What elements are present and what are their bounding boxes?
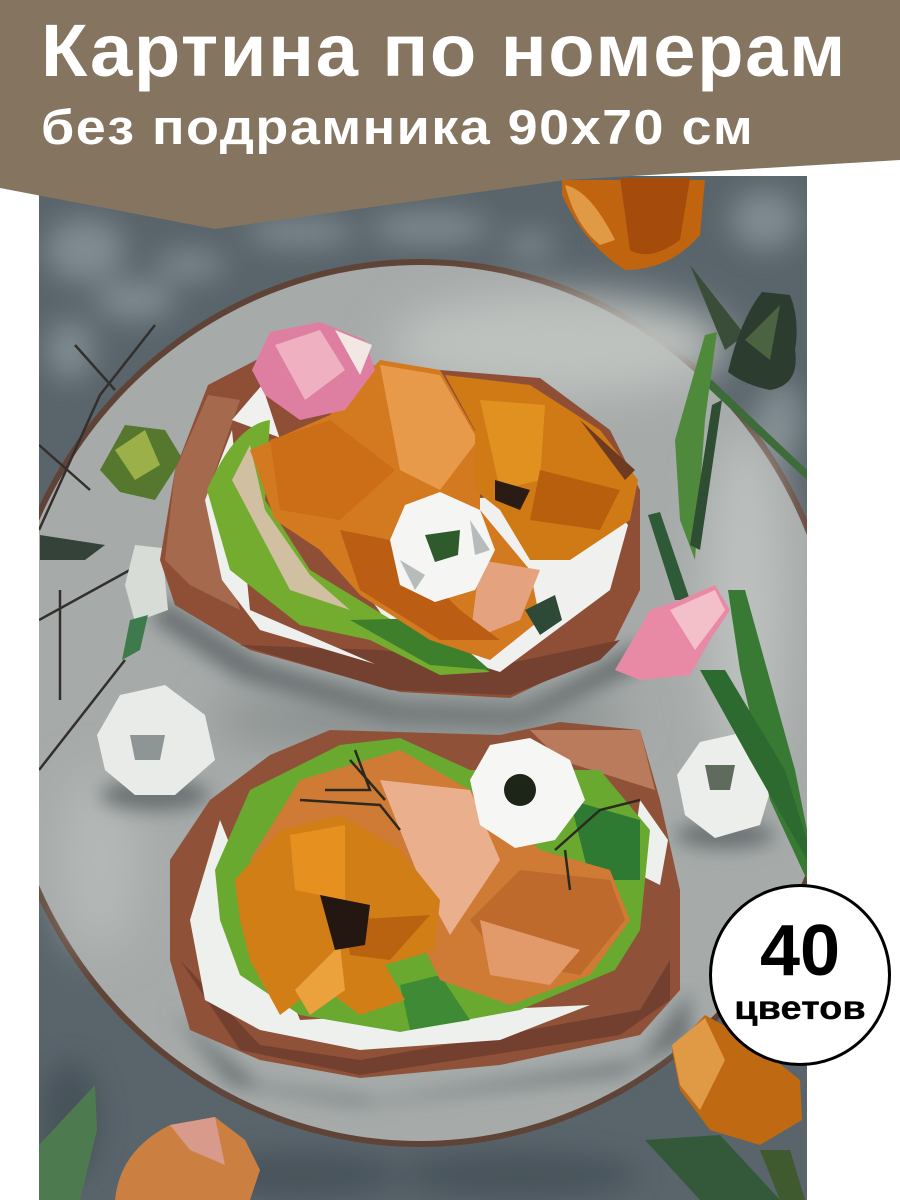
white daisy bottom [470, 738, 585, 848]
pink flower right [615, 585, 730, 680]
top toast crust [160, 358, 640, 698]
badge number: 40 [760, 911, 840, 991]
top-right leaves [690, 265, 807, 480]
bottom toast avocado [215, 738, 650, 1032]
badge: 40 colours [709, 884, 891, 1066]
small dark spot [525, 595, 562, 635]
bottom-right tulip and leaf [645, 1015, 805, 1200]
top toast salmon [250, 360, 540, 660]
top tulip [562, 178, 705, 270]
top toast avocado [207, 420, 490, 675]
header banner [0, 0, 900, 229]
toast shadows [100, 600, 775, 1105]
loose white flowers [97, 685, 775, 838]
bottom-left tulip and leaf [39, 1085, 260, 1200]
bottom toast salmon [250, 750, 630, 1005]
badge label: цветов [734, 989, 866, 1026]
herbs on bottom toast [300, 750, 640, 890]
right stems and leaves [648, 332, 807, 880]
subtitle: без подрамника 90х70 см [41, 101, 754, 155]
white daisy top [390, 492, 495, 602]
bottom toast cream [190, 800, 668, 1050]
orange flower on top toast [445, 375, 638, 560]
plate [0, 259, 845, 1147]
painting background: slate table [39, 176, 807, 1200]
title: Картина по номерам [41, 9, 847, 92]
top toast cream [205, 385, 628, 672]
bottom toast crust [170, 722, 680, 1078]
pink flower [252, 322, 375, 420]
orange flower on bottom toast [235, 815, 440, 1015]
left twigs and leaves [39, 325, 182, 770]
painting: toast on a plate [39, 176, 807, 1200]
